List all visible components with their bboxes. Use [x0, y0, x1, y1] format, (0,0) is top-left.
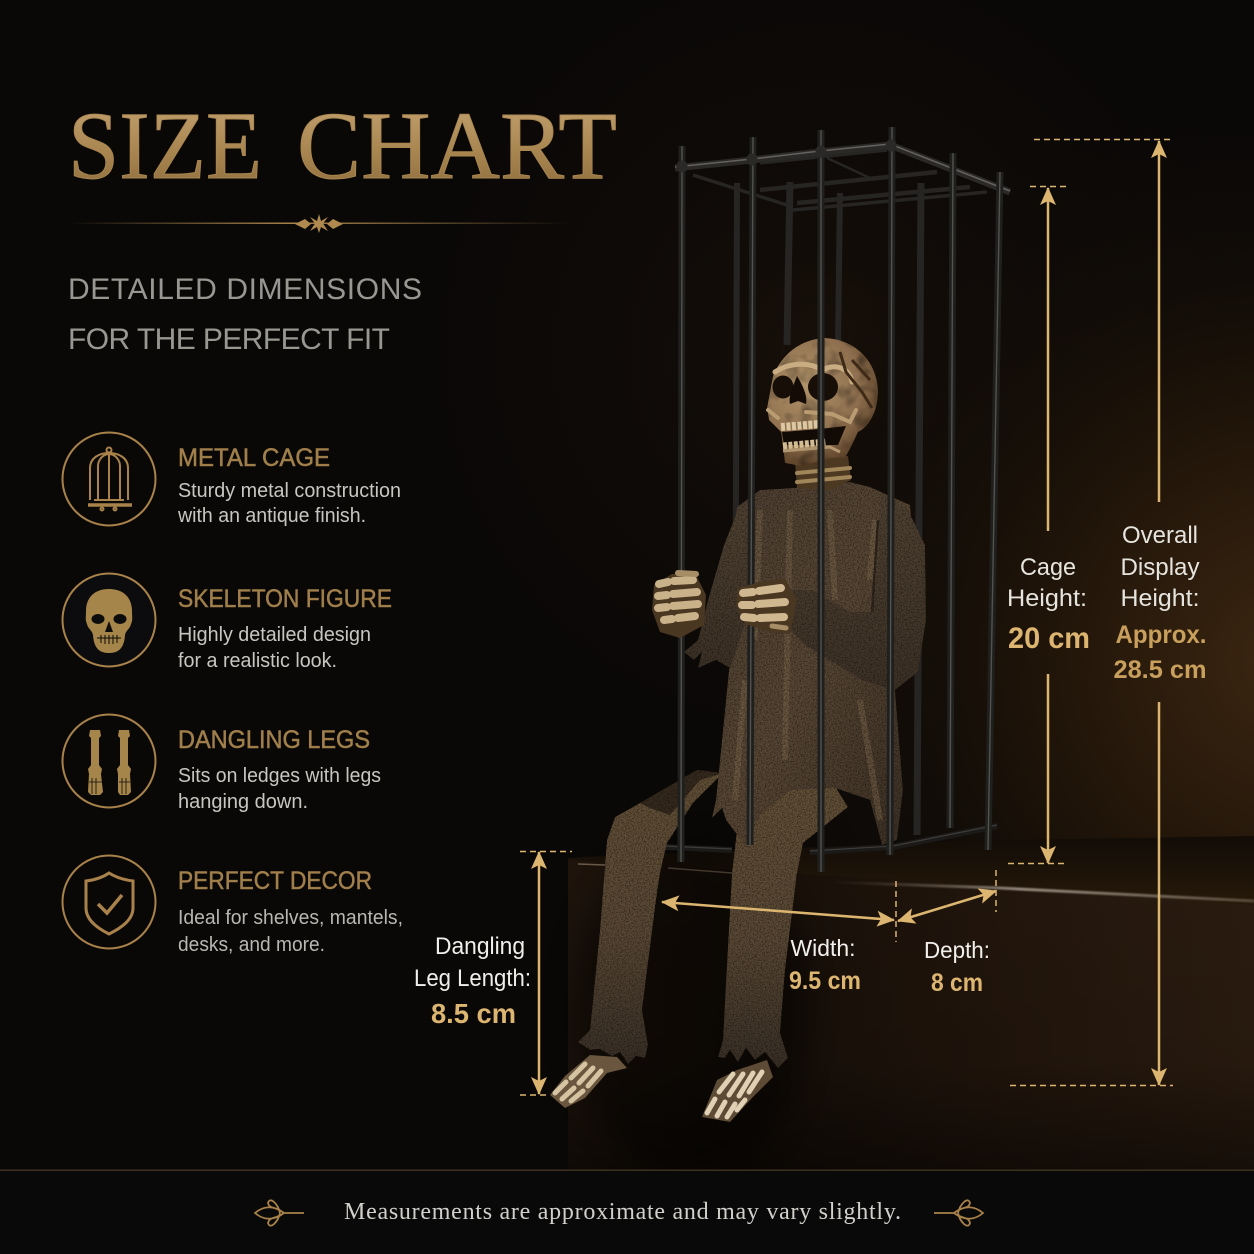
description: with an antique finish.	[177, 505, 366, 527]
heading: SKELETON FIGURE	[178, 585, 392, 613]
arrow	[896, 870, 996, 942]
label	[924, 937, 990, 997]
description: desks, and more.	[178, 934, 325, 956]
right leg	[718, 783, 848, 1068]
label: Height:	[1120, 585, 1200, 612]
icon: leg bones	[62, 714, 156, 808]
title	[68, 92, 617, 199]
description	[178, 907, 403, 956]
dimension: cage height	[1007, 186, 1090, 864]
label: 28.5 cm	[1114, 656, 1206, 684]
arrow	[662, 902, 894, 920]
ornament left	[255, 1200, 304, 1226]
heading: DANGLING LEGS	[178, 726, 370, 754]
dimension: dangling leg length	[414, 852, 572, 1095]
subtitle: FOR THE PERFECT FIT	[68, 323, 390, 356]
description	[178, 624, 371, 672]
label	[1007, 554, 1090, 655]
label: 8 cm	[931, 969, 983, 997]
left sleeve	[684, 505, 752, 668]
dimension: overall display height	[1010, 140, 1206, 1086]
arrows	[1010, 140, 1173, 1086]
label: Display	[1120, 554, 1200, 581]
left hand	[652, 573, 706, 638]
ornament right	[934, 1200, 983, 1226]
description: Sturdy metal construction	[178, 480, 401, 502]
skeleton figure	[550, 127, 1010, 1122]
icon: shield check	[62, 856, 156, 948]
label	[789, 935, 861, 995]
label: Width:	[790, 935, 856, 961]
label: Overall	[1122, 522, 1198, 549]
divider ornament	[70, 214, 570, 233]
dimension: width	[662, 902, 894, 995]
footnote: Measurements are approximate and may vary slightly.	[344, 1199, 901, 1225]
label: Cage	[1020, 554, 1076, 581]
right foot	[702, 1060, 773, 1122]
right hand	[736, 578, 797, 634]
dimension: depth	[896, 870, 996, 997]
cage top rails and front bars	[675, 127, 1010, 872]
description: for a realistic look.	[178, 650, 337, 672]
left foot	[550, 1055, 627, 1108]
left leg	[578, 770, 723, 1064]
feature: dangling legs	[62, 714, 381, 813]
title: SIZE	[68, 92, 262, 199]
label: Leg Length:	[414, 965, 531, 992]
icon: skull	[62, 574, 156, 666]
heading: METAL CAGE	[178, 444, 330, 472]
description: Sits on ledges with legs	[178, 765, 381, 787]
label	[414, 933, 531, 1029]
ledge	[568, 836, 1254, 1180]
label: 9.5 cm	[789, 967, 861, 995]
label: 20 cm	[1008, 622, 1090, 655]
description: Highly detailed design	[178, 624, 371, 646]
title: CHART	[297, 92, 617, 199]
description	[178, 765, 381, 813]
neck	[795, 456, 851, 490]
subtitle	[68, 273, 422, 356]
right sleeve	[790, 492, 926, 690]
feature: skeleton figure	[62, 574, 392, 672]
label	[1114, 522, 1206, 684]
feature: metal cage	[62, 432, 401, 527]
label: Height:	[1007, 585, 1087, 612]
description: Ideal for shelves, mantels,	[178, 907, 403, 929]
heading: PERFECT DECOR	[178, 867, 372, 895]
icon: birdcage	[62, 432, 156, 526]
arrows	[520, 852, 572, 1095]
label: 8.5 cm	[431, 998, 516, 1029]
panel: title block	[68, 92, 617, 356]
shirt torso	[712, 482, 915, 845]
label: Approx.	[1116, 621, 1206, 649]
cage back bars and rails	[693, 150, 987, 835]
label: Depth:	[924, 937, 990, 963]
label: Dangling	[435, 933, 525, 960]
feature: perfect decor	[62, 856, 403, 956]
arrows	[1008, 186, 1066, 864]
description: hanging down.	[178, 791, 308, 813]
footer band	[0, 1170, 1254, 1254]
description	[177, 480, 401, 527]
skull	[767, 338, 878, 466]
subtitle: DETAILED DIMENSIONS	[68, 273, 422, 306]
cage bottom rails	[663, 825, 997, 852]
